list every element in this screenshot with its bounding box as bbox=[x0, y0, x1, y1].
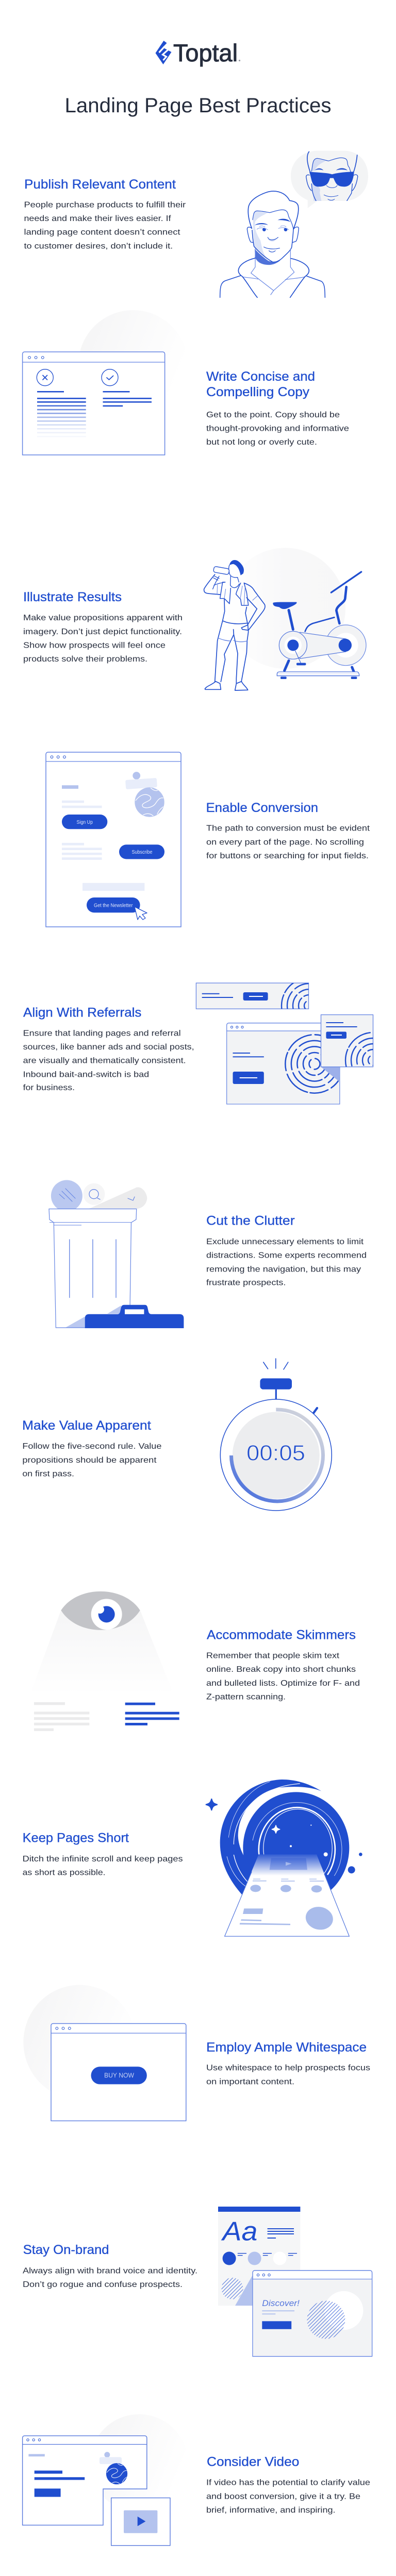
body text: online. Break copy into short chunks bbox=[206, 1665, 356, 1674]
body text: propositions should be apparent bbox=[22, 1456, 157, 1465]
illustration: trash can bbox=[49, 1180, 184, 1328]
button: sign up bbox=[62, 815, 107, 829]
body text: Show how prospects will feel once bbox=[23, 641, 166, 650]
button: subscribe: Subscribe bbox=[132, 849, 153, 855]
panel: accommodate skimmers bbox=[30, 1591, 360, 1731]
body text: are visually and thematically consistent. bbox=[23, 1057, 186, 1065]
browser window bbox=[23, 352, 165, 455]
body text bbox=[206, 824, 370, 860]
illustration: social post card bbox=[321, 1014, 373, 1067]
button: get the newsletter bbox=[87, 897, 140, 912]
body text: landing page content doesn’t connect bbox=[24, 228, 180, 237]
body text: Exclude unnecessary elements to limit bbox=[206, 1238, 364, 1246]
illustration: stopwatch bbox=[220, 1359, 332, 1511]
illustration: page emerging from portal bbox=[206, 1780, 362, 1936]
illustration: on-brand page window: Discover! bbox=[262, 2299, 300, 2308]
title: Landing Page Best Practices bbox=[65, 94, 331, 117]
body text bbox=[206, 411, 349, 447]
body text: Don’t go rogue and confuse prospects. bbox=[23, 2280, 183, 2289]
heading: Make Value Apparent bbox=[22, 1418, 151, 1433]
panel: stay on-brand bbox=[23, 2207, 372, 2357]
header logo: Toptal bbox=[173, 39, 238, 66]
heading: Accommodate Skimmers bbox=[207, 1628, 356, 1642]
body text: People purchase products to fulfill their bbox=[24, 201, 186, 209]
heading: Publish Relevant Content bbox=[24, 177, 176, 192]
panel: keep pages short bbox=[23, 1780, 362, 1936]
type sample: Aa bbox=[221, 2217, 257, 2247]
heading: Compelling Copy bbox=[206, 385, 310, 399]
body text bbox=[24, 201, 186, 250]
body text bbox=[23, 1855, 183, 1877]
body text: Follow the five-second rule. Value bbox=[22, 1442, 162, 1451]
body text: products solve their problems. bbox=[23, 655, 147, 664]
icon: check bbox=[102, 369, 118, 386]
colour swatches bbox=[223, 2251, 287, 2265]
body text: Ensure that landing pages and referral bbox=[23, 1029, 181, 1038]
heading: Employ Ample Whitespace bbox=[206, 2040, 367, 2055]
illustration: brand guide sheet bbox=[218, 2207, 300, 2306]
heading: Keep Pages Short bbox=[23, 1831, 129, 1845]
body text: imagery. Don’t just depict functionality. bbox=[23, 628, 182, 636]
illustration: page with video card bbox=[23, 2414, 188, 2546]
body text bbox=[206, 1238, 367, 1287]
heading: Cut the Clutter bbox=[206, 1214, 295, 1228]
button: get the newsletter: Get the Newsletter bbox=[94, 902, 133, 908]
panel: cut the clutter bbox=[49, 1180, 367, 1328]
man with towel and bottle bbox=[204, 560, 265, 690]
body text: on every part of the page. No scrolling bbox=[206, 838, 364, 846]
heading bbox=[206, 369, 315, 399]
face shadows bbox=[253, 211, 268, 260]
heading: Enable Conversion bbox=[206, 801, 318, 815]
heading: Align With Referrals bbox=[23, 1006, 141, 1020]
body text: as short as possible. bbox=[23, 1869, 106, 1877]
body text: on first pass. bbox=[22, 1470, 74, 1479]
body text bbox=[23, 2266, 197, 2289]
illustration: landing page window bbox=[227, 1023, 344, 1104]
body text: to customer desires, don’t include it. bbox=[24, 242, 173, 250]
body text: needs and make their lives easier. If bbox=[24, 214, 171, 223]
body text: removing the navigation, but this may bbox=[206, 1265, 361, 1274]
panel: make value apparent bbox=[22, 1359, 332, 1511]
image placeholder: globe bbox=[125, 772, 164, 817]
body text: Ditch the infinite scroll and keep pages bbox=[23, 1855, 183, 1863]
illustration: eye scanning text bbox=[30, 1591, 179, 1731]
panel: illustrate results bbox=[23, 548, 366, 690]
panel: publish relevant content bbox=[24, 151, 368, 297]
button: buy now bbox=[91, 2066, 147, 2084]
body text bbox=[22, 1442, 162, 1479]
illustration: man imagining himself with sunglasses bbox=[220, 151, 368, 297]
body text: and bulleted lists. Optimize for F- and bbox=[206, 1679, 360, 1688]
body text: Remember that people skim text bbox=[206, 1651, 340, 1660]
body text: Use whitespace to help prospects focus bbox=[206, 2064, 370, 2073]
neck and hoodie bbox=[242, 249, 305, 295]
body text: but not long or overly cute. bbox=[206, 438, 317, 447]
illustration: page with call to action buttons bbox=[46, 752, 181, 927]
body text: Always align with brand voice and identity. bbox=[23, 2266, 197, 2275]
heading: Stay On-brand bbox=[23, 2243, 109, 2257]
body text bbox=[206, 2064, 370, 2087]
button: buy now: BUY NOW bbox=[104, 2072, 134, 2079]
portal swirl bbox=[220, 1780, 321, 1895]
illustration: browser comparing long and short copy bbox=[23, 310, 188, 455]
icon: cross bbox=[37, 369, 53, 386]
heading: Write Concise and bbox=[206, 369, 315, 384]
icon: play bbox=[138, 2516, 145, 2526]
body text: for buttons or searching for input fields. bbox=[206, 852, 369, 860]
body text bbox=[23, 614, 183, 664]
body text bbox=[23, 1029, 194, 1092]
body text: for business. bbox=[23, 1083, 75, 1092]
body text: and boost conversion, give it a try. Be bbox=[206, 2492, 360, 2501]
faded text bbox=[34, 1702, 89, 1731]
long copy lines bbox=[37, 391, 86, 437]
body text: distractions. Some experts recommend bbox=[206, 1251, 367, 1260]
icon: cursor bbox=[135, 907, 147, 920]
panel: employ ample whitespace bbox=[23, 1985, 370, 2121]
panel: enable conversion bbox=[46, 752, 370, 927]
illustration: banner ad bbox=[196, 982, 309, 1009]
briefcase bbox=[85, 1305, 184, 1328]
thought bubble bbox=[291, 151, 368, 208]
exercise bike bbox=[273, 572, 366, 679]
video card bbox=[111, 2498, 170, 2546]
body text: The path to conversion must be evident bbox=[206, 824, 370, 833]
body text: sources, like banner ads and social posts, bbox=[23, 1043, 194, 1052]
panel: consider video bbox=[23, 2414, 370, 2546]
button: subscribe bbox=[119, 844, 164, 859]
body text: If video has the potential to clarify value bbox=[206, 2479, 370, 2487]
hair and head bbox=[248, 191, 299, 229]
star and dots bbox=[206, 1799, 218, 1810]
button: sign up: Sign Up bbox=[76, 819, 93, 825]
scannable text bbox=[125, 1703, 179, 1725]
body text bbox=[206, 1651, 360, 1702]
short copy lines bbox=[103, 391, 152, 406]
body text: thought-provoking and informative bbox=[206, 425, 349, 433]
illustration: man and exercise bike bbox=[204, 548, 366, 690]
body text: Inbound bait-and-switch is bad bbox=[23, 1070, 149, 1079]
page sheet bbox=[225, 1854, 349, 1936]
illustration: sparse page with one button bbox=[23, 1985, 186, 2121]
body text: on important content. bbox=[206, 2077, 294, 2087]
illustration: on-brand page window bbox=[253, 2270, 372, 2357]
body text: Make value propositions apparent with bbox=[23, 614, 183, 622]
body text: Get to the point. Copy should be bbox=[206, 411, 340, 419]
body text: Z-pattern scanning. bbox=[206, 1693, 286, 1702]
body text: frustrate prospects. bbox=[206, 1279, 286, 1287]
heading: Consider Video bbox=[207, 2455, 299, 2469]
heading: Illustrate Results bbox=[23, 590, 122, 604]
panel: write concise and compelling copy bbox=[23, 310, 349, 455]
body text bbox=[206, 2479, 370, 2515]
eyes, nose, mouth bbox=[255, 219, 290, 225]
stars inside portal bbox=[272, 1825, 280, 1834]
panel: align with referrals bbox=[23, 978, 396, 1104]
timer value: 00:05 bbox=[246, 1441, 305, 1466]
body text: brief, informative, and inspiring. bbox=[206, 2506, 335, 2515]
